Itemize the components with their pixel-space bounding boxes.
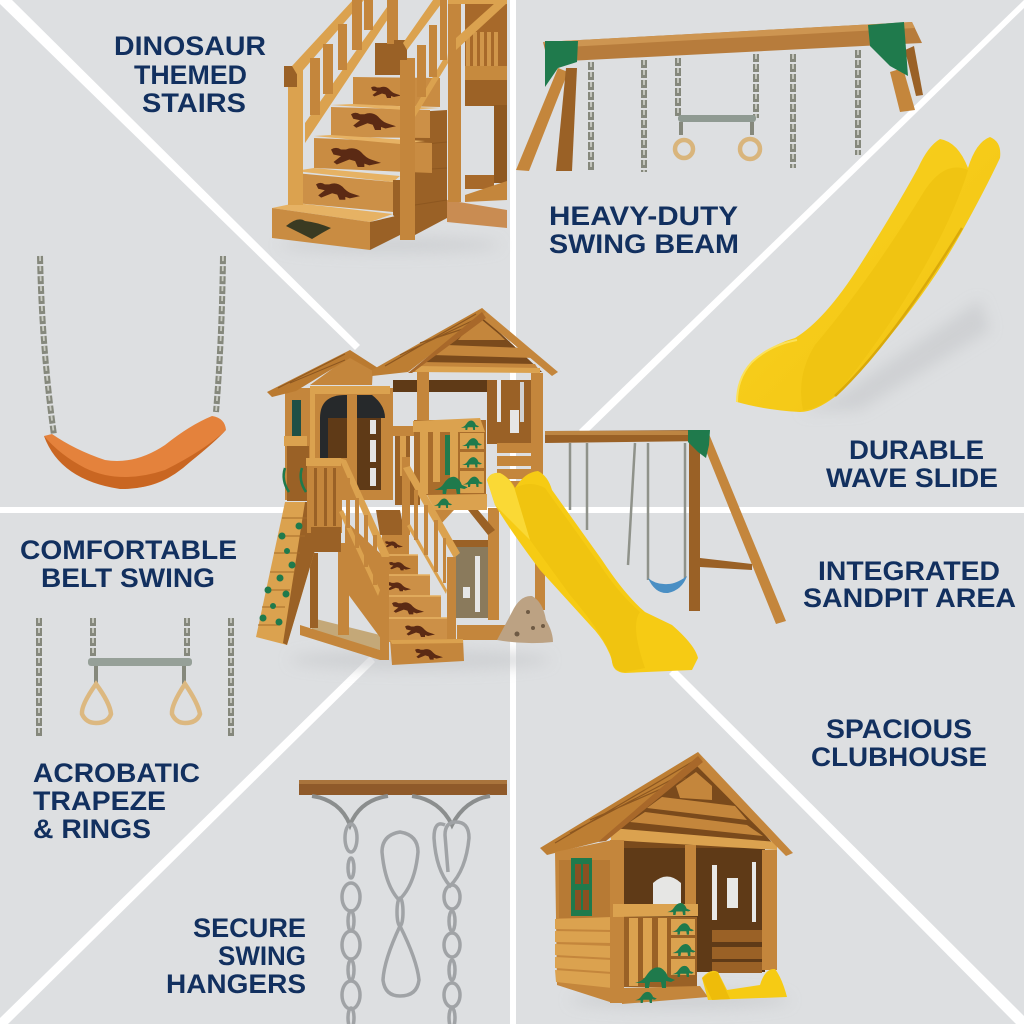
main yellow slide (487, 471, 698, 673)
panel: durable wave slide (737, 137, 1000, 493)
boulder (497, 596, 553, 643)
swing chains (591, 50, 858, 172)
illustration: yellow wave slide (737, 137, 1000, 412)
illustration: orange belt swing (40, 256, 226, 489)
heading: dinosaur themed stairs: STAIRS (142, 88, 246, 118)
heading: acrobatic trapeze and rings (33, 758, 200, 844)
heading: spacious clubhouse: CLUBHOUSE (811, 742, 987, 772)
heading: acrobatic trapeze and rings: TRAPEZE (33, 786, 166, 816)
stair railings (339, 457, 460, 660)
swing chains and blue seat (570, 443, 687, 593)
heading: heavy-duty swing beam (549, 201, 739, 259)
small house (267, 350, 393, 501)
illustration: beam, hooks, chains and carabiners (299, 780, 507, 1024)
swing frame (545, 430, 786, 624)
panel: integrated sandpit area heading (803, 556, 1016, 613)
climbing wall (256, 502, 315, 645)
right railing (394, 0, 448, 240)
heading: secure swing hangers: HANGERS (166, 969, 306, 999)
illustration: trapeze and rings (39, 618, 231, 736)
heading: dinosaur themed stairs: THEMED (134, 60, 247, 90)
panel: integrated sandpit area heading: SANDPIT AREA (803, 583, 1016, 613)
left deck railing (306, 458, 342, 552)
illustration: wooden staircase (272, 0, 507, 250)
trapeze bar and rings (675, 115, 760, 159)
panel: integrated sandpit area heading: INTEGRATED (818, 556, 1000, 586)
back wall and interior (393, 380, 545, 620)
illustration: clubhouse (540, 752, 793, 1004)
heading: comfortable belt swing: COMFORTABLE (20, 535, 237, 565)
central play set (256, 308, 786, 673)
dinosaur panel (413, 418, 487, 510)
panel: acrobatic trapeze and rings (33, 618, 231, 844)
heading: heavy-duty swing beam: SWING BEAM (549, 229, 739, 259)
panel: comfortable belt swing (20, 256, 237, 593)
panel: secure swing hangers (166, 780, 507, 1024)
heading: acrobatic trapeze and rings: & RINGS (33, 814, 151, 844)
main stairs with dinosaur silhouettes (339, 457, 464, 665)
heading: secure swing hangers: SECURE (193, 913, 306, 943)
heading: dinosaur themed stairs (114, 31, 266, 118)
panel: spacious clubhouse (540, 714, 987, 1004)
heading: durable wave slide (826, 435, 998, 493)
panel: dinosaur themed stairs (114, 0, 507, 250)
heading: spacious clubhouse: SPACIOUS (826, 714, 972, 744)
small yellow slide (702, 969, 787, 1000)
heading: spacious clubhouse (811, 714, 987, 772)
deck and sand base (300, 510, 505, 660)
heading: durable wave slide: DURABLE (849, 435, 984, 465)
illustration: swing beam (516, 22, 923, 172)
panel: heavy-duty swing beam (516, 22, 923, 259)
heading: dinosaur themed stairs: DINOSAUR (114, 31, 266, 61)
heading: comfortable belt swing (20, 535, 237, 593)
heading: heavy-duty swing beam: HEAVY-DUTY (549, 201, 738, 231)
heading: secure swing hangers (166, 913, 306, 999)
heading: secure swing hangers: SWING (218, 941, 306, 971)
big house roof and posts (372, 308, 558, 478)
heading: durable wave slide: WAVE SLIDE (826, 463, 998, 493)
heading: acrobatic trapeze and rings: ACROBATIC (33, 758, 200, 788)
heading: comfortable belt swing: BELT SWING (41, 563, 215, 593)
left railing (284, 0, 398, 205)
